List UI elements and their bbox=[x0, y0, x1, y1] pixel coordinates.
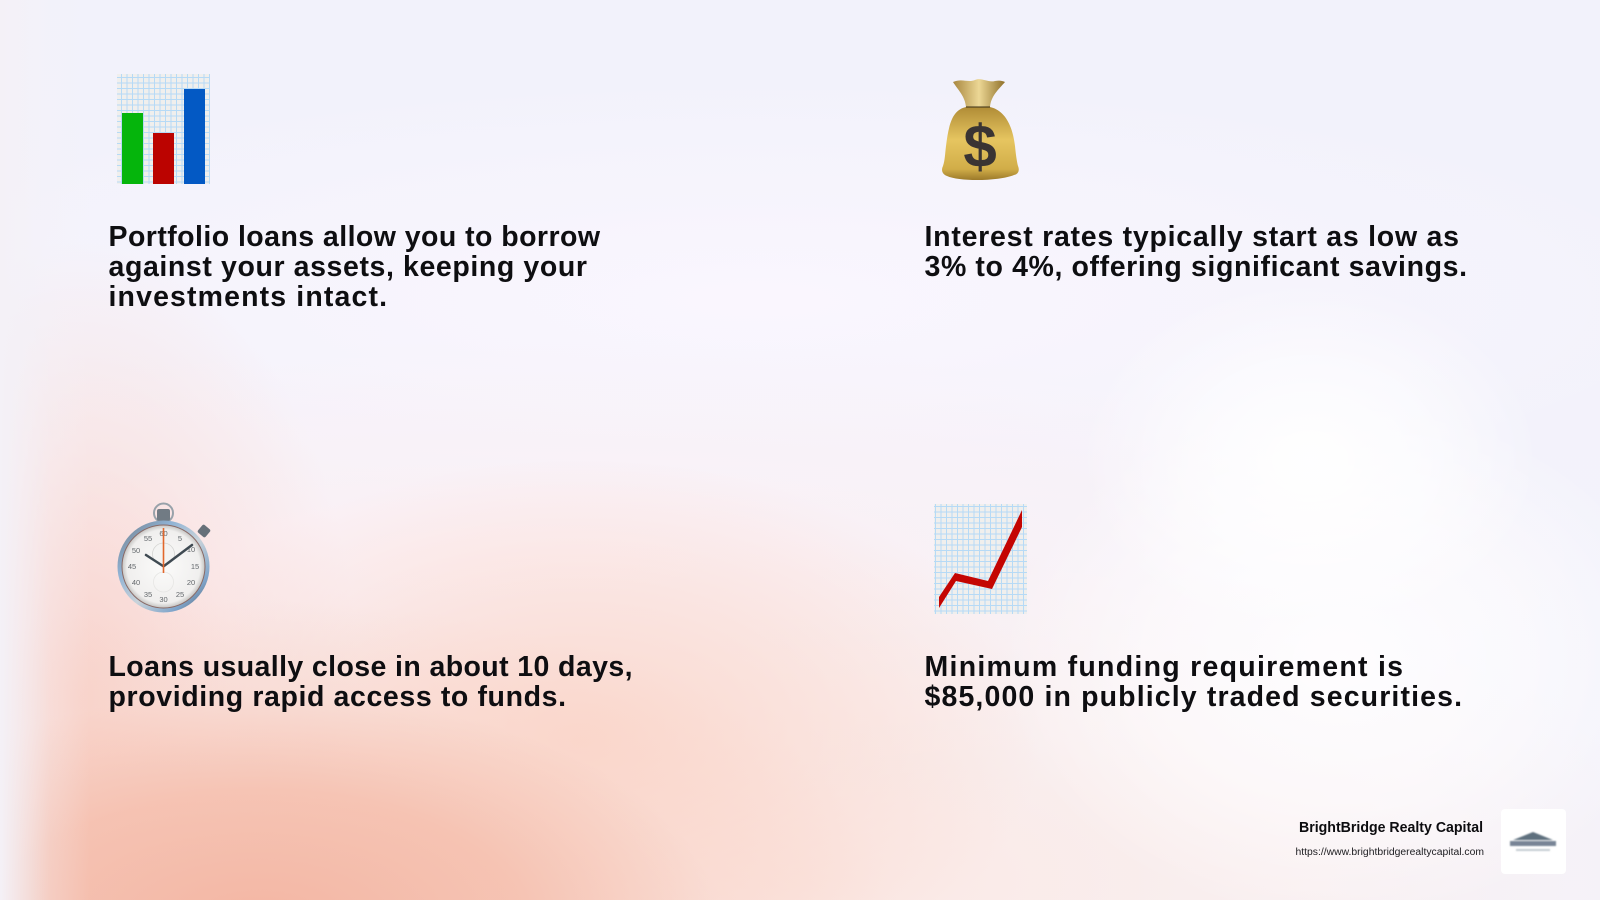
icon: bar chart bbox=[117, 74, 210, 184]
icon: stopwatch: 60 bbox=[159, 529, 168, 538]
text: portfolio loans bbox=[108, 221, 601, 313]
icon: rising chart bbox=[934, 504, 1027, 614]
footer: logo card bbox=[1501, 809, 1566, 874]
text: interest rates: Interest rates typically start as low as bbox=[924, 221, 1459, 253]
text: portfolio loans: investments intact. bbox=[108, 281, 387, 313]
icon: stopwatch: 20 bbox=[187, 578, 195, 587]
footer: company url: https://www.brightbridgerealtycapital.com bbox=[1296, 847, 1484, 858]
footer: company name: BrightBridge Realty Capital bbox=[1299, 820, 1483, 836]
text: minimum funding: $85,000 in publicly traded securities. bbox=[924, 681, 1462, 713]
icon: stopwatch: 10 bbox=[187, 545, 195, 554]
text: interest rates bbox=[924, 221, 1467, 283]
icon: stopwatch bbox=[118, 504, 211, 612]
icon: stopwatch: 5 bbox=[178, 534, 182, 543]
text: interest rates: 3% to 4%, offering significant savings. bbox=[924, 251, 1467, 283]
icon: stopwatch: 25 bbox=[176, 590, 184, 599]
text: minimum funding: Minimum funding requirement is bbox=[924, 651, 1403, 683]
text: loan closing: Loans usually close in about 10 days, bbox=[108, 651, 632, 683]
icon: stopwatch: 35 bbox=[144, 590, 152, 599]
text: minimum funding bbox=[924, 651, 1462, 713]
icon: stopwatch: 50 bbox=[132, 546, 140, 555]
icon: money bag bbox=[942, 79, 1019, 180]
text: loan closing bbox=[108, 651, 632, 713]
text: loan closing: providing rapid access to funds. bbox=[108, 681, 566, 713]
icon: stopwatch: 45 bbox=[128, 562, 136, 571]
icon: stopwatch: 55 bbox=[144, 534, 152, 543]
icon: money bag: $ bbox=[963, 113, 997, 180]
text: portfolio loans: against your assets, keeping your bbox=[108, 251, 587, 283]
icon: stopwatch: 15 bbox=[191, 562, 199, 571]
text: portfolio loans: Portfolio loans allow you to borrow bbox=[108, 221, 601, 253]
icon: stopwatch: 40 bbox=[132, 578, 140, 587]
icon: stopwatch: 30 bbox=[159, 595, 168, 604]
